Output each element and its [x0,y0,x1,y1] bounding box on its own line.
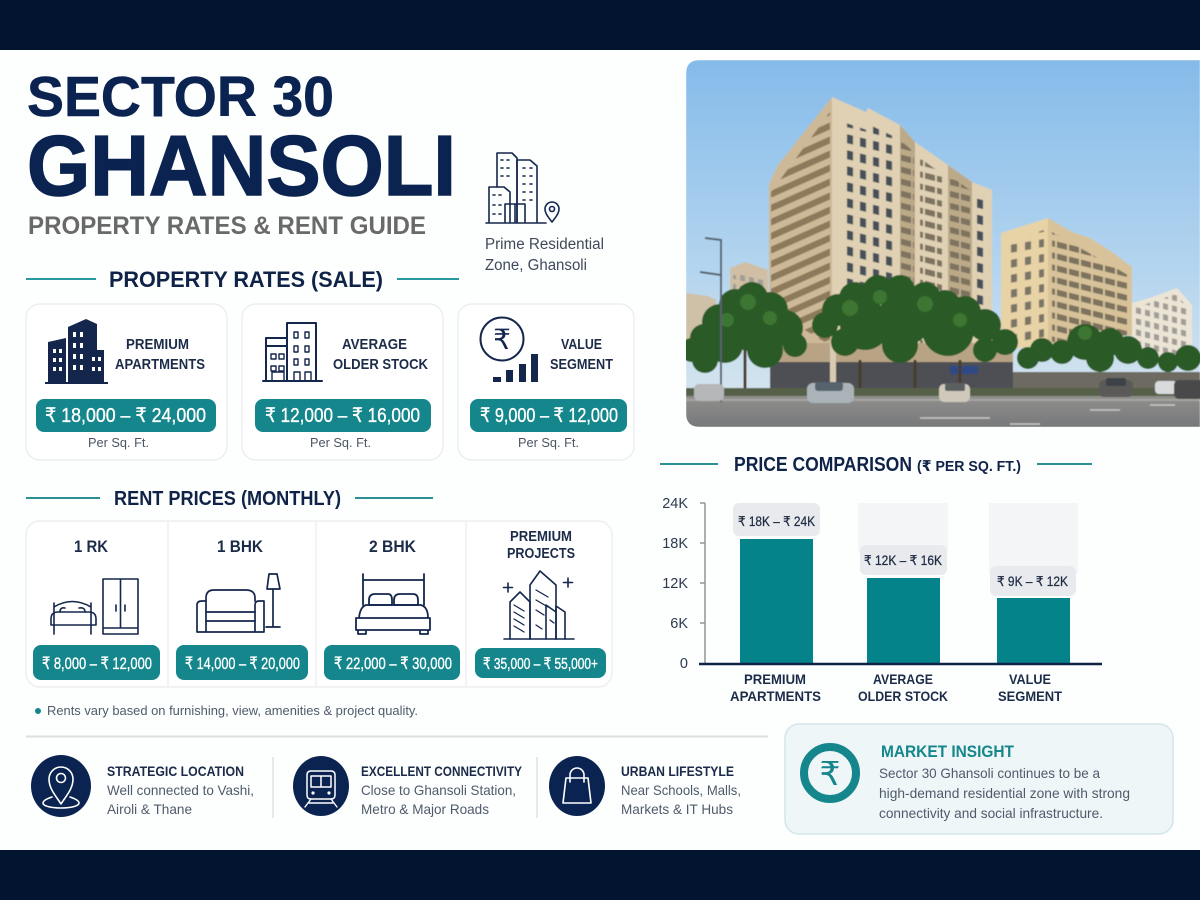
y axis [662,496,705,672]
caption: prime residential zone: Prime Residential [485,236,604,253]
label: APARTMENTS [115,356,205,373]
label: SEGMENT [550,356,613,373]
title: sector 30: SECTOR 30 [27,65,334,129]
unit: Per Sq. Ft. [518,435,579,450]
title block [27,65,456,240]
price pill [36,399,216,432]
text [107,764,254,817]
icon: older building [263,323,322,381]
y axis: 6K [670,616,688,632]
rent pill [33,645,160,680]
panel: value segment [458,304,634,460]
category labels: APARTMENTS [730,688,821,704]
text: EXCELLENT CONNECTIVITY [361,764,522,779]
feature: urban lifestyle [549,756,741,817]
callout body [879,765,1130,821]
icon: premium apartment towers [45,319,108,383]
column: 1 BHK [176,537,308,680]
label: VALUE [561,336,602,353]
label: OLDER STOCK [333,356,428,373]
column: 1 RK [33,537,160,680]
rent pill: ₹ 8,000 – ₹ 12,000 [42,654,152,673]
rent pill: ₹ 14,000 – ₹ 20,000 [185,654,300,673]
callout body: high-demand residential zone with strong [879,785,1130,801]
bar: premium apartments: ₹ 18K – ₹ 24K [738,514,815,529]
icon: city buildings with location pin [486,153,559,223]
icon: rupee coin with rising bars: ₹ [493,324,511,355]
column: 1 BHK: 1 BHK [217,537,264,556]
unit: Per Sq. Ft. [88,435,149,450]
rent pill: ₹ 22,000 – ₹ 30,000 [334,654,452,673]
panel: premium apartments [26,304,227,460]
label [550,336,613,373]
text: URBAN LIFESTYLE [621,764,734,779]
text: Near Schools, Malls, [621,782,741,798]
subtitle: PROPERTY RATES & RENT GUIDE [28,212,426,240]
title: ghansoli: GHANSOLI [27,119,456,214]
text: Close to Ghansoli Station, [361,782,516,798]
bar: average older stock: ₹ 12K – ₹ 16K [864,553,942,568]
category labels: VALUE [1009,671,1051,687]
bar chart: price comparison [662,496,1102,704]
price pill: ₹ 18,000 – ₹ 24,000 [45,405,206,427]
price pill: ₹ 9,000 – ₹ 12,000 [480,405,618,427]
rent pill [475,648,606,678]
bottom band [0,850,1200,900]
category labels: OLDER STOCK [858,688,948,704]
icon: location pin [31,755,91,817]
column: premium projects: PROJECTS [507,546,575,562]
unit: Per Sq. Ft. [310,435,371,450]
panel: average older stock [242,304,443,460]
heading: price comparison [660,454,1092,476]
y axis: 24K [662,496,688,512]
y axis: 0 [680,656,688,672]
column: premium projects [475,529,606,678]
y axis: 12K [662,576,688,592]
heading: rent prices (monthly): RENT PRICES (MONTHLY) [114,488,341,510]
category labels: PREMIUM [744,671,806,687]
bar: average older stock [858,503,948,663]
icon: metro train [293,756,349,816]
icon: bed and wardrobe [51,579,138,634]
text: Metro & Major Roads [361,801,489,817]
category labels: AVERAGE [873,671,933,687]
note: rent variation: Rents vary based on furnishing, view, amenities & project quality. [47,703,418,718]
feature: strategic location [31,755,254,817]
bar: value segment: ₹ 9K – ₹ 12K [997,574,1068,589]
feature: excellent connectivity [293,756,522,817]
price pill [255,399,431,432]
icon: shopping bag [549,756,605,816]
icon: double bed [356,574,430,634]
rent pill [324,645,460,680]
heading: price comparison: PRICE COMPARISON [734,454,912,476]
top band [0,0,1200,50]
bar: premium apartments [733,503,820,663]
caption: prime residential zone: Zone, Ghansoli [485,257,587,274]
bar: value segment [989,503,1078,663]
callout body: connectivity and social infrastructure. [879,805,1103,821]
text: Markets & IT Hubs [621,801,733,817]
callout body: Sector 30 Ghansoli continues to be a [879,765,1100,781]
label [115,336,205,373]
panel: rent prices [26,521,612,687]
column: 1 RK: 1 RK [74,537,109,556]
price pill [470,399,627,432]
text [621,764,741,817]
icon: rupee ring: ₹ [820,755,840,792]
caption: prime residential zone [485,236,604,274]
heading: property rates (sale): PROPERTY RATES (SALE) [109,267,383,292]
label: AVERAGE [342,336,407,353]
icon: premium towers with sparkles [504,571,574,639]
text: Well connected to Vashi, [107,782,254,798]
callout: market insight [785,724,1173,834]
category labels: SEGMENT [998,688,1062,704]
column: 2 BHK [324,537,460,680]
category labels [730,671,1062,704]
label: PREMIUM [126,336,189,353]
icon: sofa and floor lamp [197,574,280,632]
rent pill: ₹ 35,000 – ₹ 55,000+ [483,656,598,673]
rent pill [176,645,308,680]
callout heading: MARKET INSIGHT [881,742,1015,761]
heading: price comparison: (₹ PER SQ. FT.) [917,458,1021,475]
column: premium projects: PREMIUM [510,529,572,545]
text [361,764,522,817]
icon: rupee ring [804,747,856,799]
price pill: ₹ 12,000 – ₹ 16,000 [265,405,420,427]
label [333,336,428,373]
column: 2 BHK: 2 BHK [369,537,417,556]
text: STRATEGIC LOCATION [107,764,244,779]
y axis: 18K [662,536,688,552]
text: Airoli & Thane [107,801,192,817]
photo: residential towers on street [680,60,1200,427]
icon: rupee coin with rising bars [480,318,538,382]
